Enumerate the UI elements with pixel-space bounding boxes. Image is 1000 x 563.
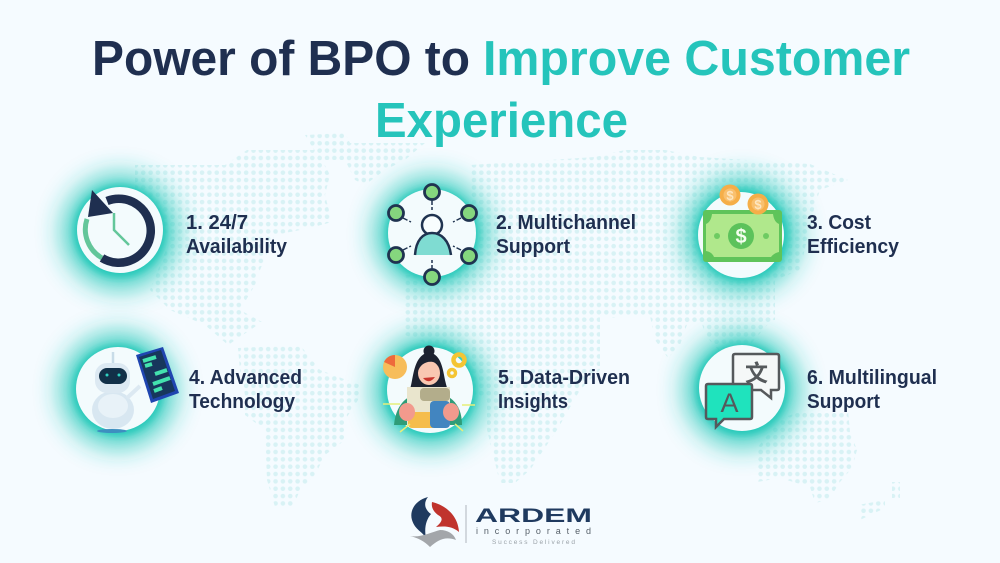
icon: translation bubbles: A (720, 388, 739, 418)
icon: clock (62, 174, 178, 290)
icon: translation bubbles (684, 332, 800, 448)
panel: 24/7 availability (62, 174, 288, 290)
label (189, 367, 302, 413)
wordmark (475, 506, 592, 546)
label: 4. Advanced (189, 367, 302, 389)
logo mark (410, 497, 459, 547)
label: Availability (186, 236, 288, 258)
label: 2. Multichannel (496, 212, 636, 234)
title: Power of BPO to (92, 32, 470, 86)
icon: banknote and coins: $ (726, 188, 734, 203)
icon: banknote and coins: $ (735, 226, 747, 248)
label: Efficiency (807, 236, 900, 258)
icon: robot with tablet (60, 332, 179, 448)
label: 5. Data-Driven (498, 367, 630, 389)
label: 1. 24/7 (186, 212, 248, 234)
label: Support (807, 391, 880, 413)
label (186, 212, 288, 258)
label (807, 367, 937, 413)
title: Experience (375, 94, 628, 148)
label (807, 212, 900, 258)
wordmark: incorporated (476, 526, 591, 536)
icon: translation bubbles: 文 (745, 360, 768, 386)
label: 3. Cost (807, 212, 871, 234)
panel: multilingual support (684, 332, 937, 448)
title: Improve Customer (483, 32, 910, 86)
label: 6. Multilingual (807, 367, 937, 389)
wordmark: ARDEM (475, 506, 592, 527)
logo: ARDEM Incorporated (410, 497, 592, 547)
label (498, 367, 630, 413)
title (92, 32, 910, 148)
icon: banknote and coins: $ (754, 197, 762, 212)
world map dot pattern (135, 133, 900, 520)
icon: woman with puzzle (372, 333, 488, 449)
panel: multichannel support (374, 176, 636, 292)
wordmark: Success Delivered (492, 539, 575, 546)
label: Insights (498, 391, 568, 413)
label: Technology (189, 391, 296, 413)
panel: data-driven insights (372, 333, 630, 449)
icon: connected person (374, 176, 490, 292)
icon: banknote and coins (684, 177, 800, 293)
panel: cost efficiency (684, 177, 900, 293)
label: Support (496, 236, 570, 258)
label (496, 212, 636, 258)
panel: advanced technology (60, 332, 302, 448)
